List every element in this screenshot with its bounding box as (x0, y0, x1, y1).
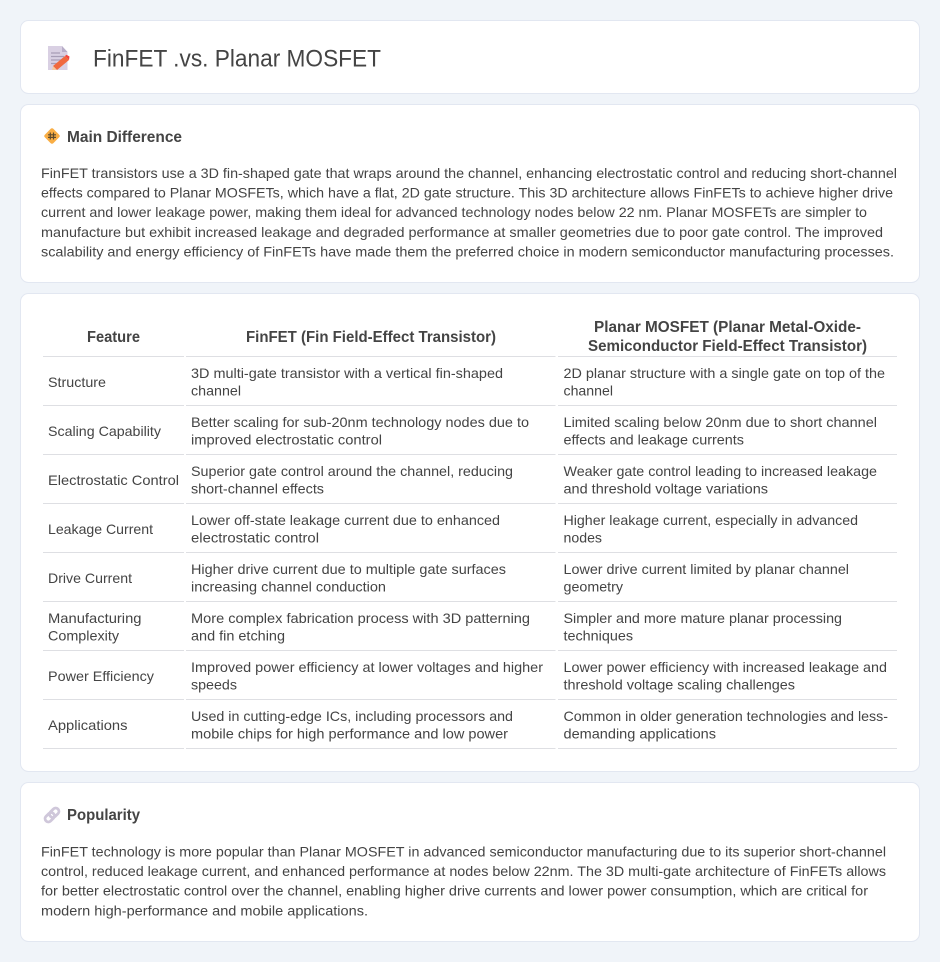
table row: drive current: Higher drive current due to multiple gate surfaces (191, 561, 506, 577)
table header row: Feature (87, 329, 140, 346)
table row: scaling capability: Scaling Capability (48, 423, 161, 439)
text block: main difference paragraph: FinFET transistors use a 3D fin-shaped gate that wraps around the channel, enhancing electrostatic control and reducing short-channel (41, 165, 897, 181)
text block: main difference paragraph: scalability and energy efficiency of FinFETs have made them the preferred choice in modern semiconductor manufacturing processes. (41, 243, 894, 259)
table row: electrostatic control: Weaker gate control leading to increased leakage (564, 463, 877, 479)
table row: electrostatic control: short-channel effects (191, 481, 324, 497)
table row: drive current: Drive Current (48, 570, 132, 586)
text block: popularity paragraph: modern high-performance and mobile applications. (41, 902, 368, 918)
icon: diamond sign (44, 128, 60, 144)
table row: power efficiency (43, 659, 897, 700)
table header row (43, 319, 897, 356)
table row: scaling capability: Limited scaling below 20nm due to short channel (564, 414, 877, 430)
table row: manufacturing complexity: Simpler and more mature planar processing (564, 610, 842, 626)
table row: structure: channel (564, 383, 613, 399)
table row: manufacturing complexity (43, 610, 897, 650)
heading: popularity: Popularity (67, 807, 140, 824)
table row: leakage current: nodes (564, 530, 602, 546)
heading: main difference: Main Difference (67, 129, 182, 146)
table row: scaling capability (43, 414, 897, 454)
table row: power efficiency: speeds (191, 677, 237, 693)
table row: applications: Used in cutting-edge ICs, including processors and (191, 708, 513, 724)
table row: applications: Common in older generation technologies and less- (564, 708, 888, 724)
table row: electrostatic control: Superior gate control around the channel, reducing (191, 463, 513, 479)
panel: main difference (20, 104, 920, 282)
table row: manufacturing complexity: Manufacturing (48, 610, 142, 626)
text block: popularity paragraph: control, reduced leakage current, and enhanced performance at nodes below 22nm. The 3D multi-gate architecture of FinFETs allows (41, 863, 886, 879)
table row: drive current: increasing channel conduction (191, 579, 386, 595)
table row: manufacturing complexity: techniques (564, 628, 633, 644)
table row: structure: channel (191, 383, 241, 399)
table row: manufacturing complexity: and fin etching (191, 628, 285, 644)
table row: electrostatic control (43, 463, 897, 504)
table row: leakage current (43, 512, 897, 552)
table row: electrostatic control: Electrostatic Control (48, 472, 179, 488)
table row: drive current (43, 561, 897, 602)
panel: title (20, 20, 920, 94)
table row: power efficiency: Power Efficiency (48, 668, 154, 684)
table row: leakage current: electrostatic control (191, 530, 319, 546)
panel: comparison table (20, 294, 920, 772)
table row: manufacturing complexity: More complex fabrication process with 3D patterning (191, 610, 530, 626)
table row: scaling capability: Better scaling for sub-20nm technology nodes due to (191, 414, 529, 430)
table row: drive current: Lower drive current limited by planar channel (564, 561, 849, 577)
title text: FinFET .vs. Planar MOSFET (93, 46, 381, 72)
table row: applications: mobile chips for high performance and low power (191, 726, 508, 742)
table header row: Planar MOSFET (Planar Metal-Oxide- (594, 319, 861, 336)
text block: main difference paragraph: manufacture but exhibit increased leakage and degraded performance at smaller geometries due to poor gate control. The improved (41, 224, 883, 240)
text block: popularity paragraph (41, 844, 886, 918)
table row: scaling capability: effects and leakage currents (564, 432, 744, 448)
table row: applications (43, 708, 897, 748)
table row: leakage current: Lower off-state leakage current due to enhanced (191, 512, 500, 528)
icon: memo with pencil (48, 46, 70, 70)
table row: leakage current: Higher leakage current, especially in advanced (564, 512, 858, 528)
table row: structure: Structure (48, 374, 106, 390)
text block: popularity paragraph: for better electrostatic control over the channel, enabling higher drive currents and lower power consumption, which are critical for (41, 883, 868, 899)
text block: main difference paragraph: current and lower leakage power, making them ideal for advanced technology nodes below 22 nm. Planar MOSFETs are simpler to (41, 204, 867, 220)
table row: structure (43, 365, 897, 406)
table header row: Semiconductor Field-Effect Transistor) (588, 338, 867, 355)
text block: popularity paragraph: FinFET technology is more popular than Planar MOSFET in advanced semiconductor manufacturing due to its superior short-channel (41, 844, 886, 860)
table row: power efficiency: Improved power efficiency at lower voltages and higher (191, 659, 543, 675)
table row: scaling capability: improved electrostatic control (191, 432, 382, 448)
table row: structure: 2D planar structure with a single gate on top of the (564, 365, 885, 381)
table row: applications: Applications (48, 717, 128, 733)
table row: power efficiency: threshold voltage scaling challenges (564, 677, 795, 693)
table row: drive current: geometry (564, 579, 623, 595)
table row: manufacturing complexity: Complexity (48, 628, 119, 644)
icon: link (44, 807, 60, 823)
text block: main difference paragraph: effects compared to Planar MOSFETs, which have a flat, 2D gate structure. This 3D architecture allows FinFETs to achieve higher drive (41, 185, 893, 201)
table header row: FinFET (Fin Field-Effect Transistor) (246, 329, 496, 346)
panel: popularity (20, 782, 920, 942)
text block: main difference paragraph (41, 165, 897, 259)
table row: leakage current: Leakage Current (48, 521, 153, 537)
table row: applications: demanding applications (564, 726, 716, 742)
table row: electrostatic control: and threshold voltage variations (564, 481, 768, 497)
table row: structure: 3D multi-gate transistor with a vertical fin-shaped (191, 365, 503, 381)
table row: power efficiency: Lower power efficiency with increased leakage and (564, 659, 887, 675)
